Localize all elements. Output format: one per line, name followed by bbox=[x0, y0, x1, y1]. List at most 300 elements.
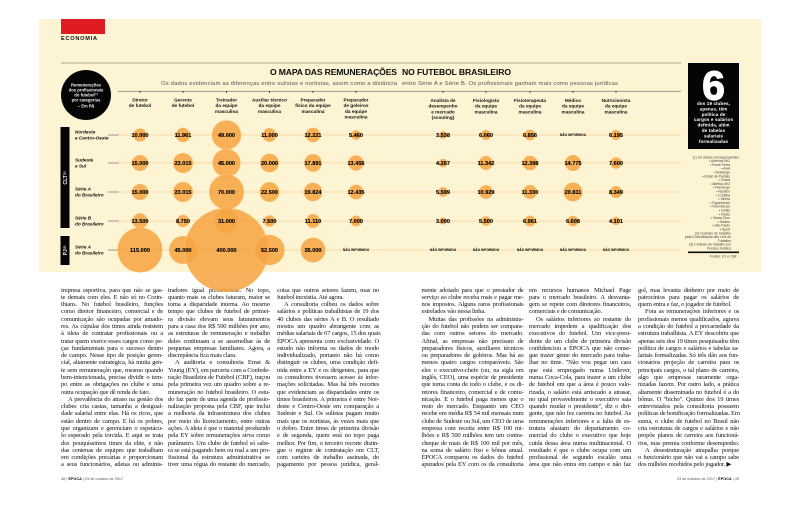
text column 3: ÉPOCA apresenta com exclusividade. O bbox=[277, 338, 379, 345]
footnotes: • Sport bbox=[720, 228, 730, 232]
row labels: Série B bbox=[75, 216, 92, 220]
text column 2: para a casa dos R$ 500 milhões por ano, bbox=[168, 323, 270, 330]
section heading: Economia: ECONOMIA bbox=[61, 36, 98, 42]
callout: black box with number 6: política de bbox=[702, 112, 726, 117]
column headers bbox=[129, 98, 631, 120]
panel: yellow chart background bbox=[39, 19, 761, 272]
sidebar: PJ: (3) bbox=[63, 246, 67, 249]
values: Nordeste e Centro-Oeste: 6.856 bbox=[523, 133, 537, 139]
text column 4: mente adotado para que o prestador de bbox=[422, 287, 524, 294]
column headers: Fisiologista bbox=[473, 98, 499, 103]
text column 1: estão dentro de campo. E há os pobres, bbox=[61, 418, 163, 425]
footnotes: (1) Os clubes correspondentes bbox=[693, 155, 739, 159]
callout: black box with number 6: salariais bbox=[704, 133, 723, 138]
values: Série A CLT: 23.015 bbox=[174, 190, 192, 196]
values: Nordeste e Centro-Oeste bbox=[131, 132, 623, 139]
column header rule with ticks bbox=[118, 91, 681, 93]
section tag: red block bbox=[61, 19, 105, 34]
sidebar: CLT bbox=[60, 127, 70, 228]
column headers: da equipe bbox=[345, 109, 367, 114]
text column 6: A desestruturação atrapalha porque bbox=[645, 447, 739, 454]
values: Sudeste e Sul: 7.600 bbox=[609, 161, 623, 167]
values: Série A CLT: 15.000 bbox=[131, 190, 149, 196]
values: Série B CLT: 3.000 bbox=[436, 219, 450, 225]
text column 5: cuida dessa área numa multinacional. O bbox=[529, 440, 631, 447]
text column 5: confidenciou a ÉPOCA que não conse- bbox=[529, 345, 631, 352]
text column 4: Muitas das profissões na administra- bbox=[428, 316, 524, 323]
values: Série A PJ: 45.000 bbox=[174, 248, 192, 254]
text column 5: lhar no time. "Não vou pegar um cara bbox=[529, 359, 631, 366]
text column 4: inglês, CEO), uma espécie de presidente bbox=[422, 374, 524, 381]
footnotes: • Atlético-MG bbox=[710, 182, 730, 186]
values: Série A CLT: 11.330 bbox=[522, 190, 538, 196]
text column 2: pela EY sobre remunerações sirva como bbox=[168, 432, 270, 439]
values: Nordeste e Centro-Oeste: 6.060 bbox=[479, 133, 493, 139]
text column 4: clube de Sudeste ou Sul, um CEO de uma bbox=[422, 418, 524, 425]
values: Sudeste e Sul bbox=[131, 161, 623, 167]
text column 1: como diretor financeiro, comercial e de bbox=[61, 308, 163, 315]
callout: black box with number 6: de tabelas bbox=[702, 128, 726, 133]
callout: black box with number 6: formalizadas bbox=[699, 139, 728, 144]
text column 5: mercial do clube o executivo que hoje bbox=[529, 432, 631, 439]
text column 4: cheque de mais de R$ 100 mil por mês, bbox=[422, 440, 524, 447]
column headers: Treinador bbox=[216, 98, 237, 102]
text column 3: médias salariais de 67 cargos, 15 dos quais bbox=[277, 330, 381, 337]
text column 3: futebol inexistia. Até agora. bbox=[277, 294, 344, 301]
text column 5: gem se repete com diretores financeiros, bbox=[529, 301, 631, 308]
column headers: masculina bbox=[519, 109, 542, 114]
text column 3: times brasileiros. A primeira é entre Nor- bbox=[277, 396, 379, 403]
text column 4: ção do futebol não podem ser compara- bbox=[422, 323, 524, 330]
text column 5: executivos do futebol. Um vice-presi- bbox=[529, 330, 631, 337]
text column 1: res. As cúpulas dos times ainda resistem bbox=[61, 323, 163, 330]
footnotes: Trabalho bbox=[718, 239, 731, 243]
text column 2 bbox=[168, 287, 270, 468]
text column 1: te demais com eles. E não só no Corin- bbox=[61, 294, 163, 301]
text column 6: cria estruturas de cargos e salários e não bbox=[638, 425, 739, 432]
text column 2: pequenas empresas familiares. Agora, a bbox=[168, 345, 270, 352]
text column 4: ÉPOCA comparou os dados do futebol bbox=[422, 454, 524, 461]
row labels: Sudeste bbox=[75, 158, 94, 162]
column headers: da equipe bbox=[605, 104, 627, 109]
text column 4: Afinal, as empresas não precisam de bbox=[422, 338, 524, 345]
footnotes: • Avaí bbox=[721, 167, 730, 171]
column headers: e mercado bbox=[431, 109, 455, 114]
text column 1: a seus funcionários, atletas ou adminis- bbox=[61, 461, 163, 468]
values: Série B CLT: 4.101 bbox=[609, 219, 623, 225]
values: Série A PJ: NÃO INFORMOU bbox=[560, 247, 587, 252]
text column 4: lhões e R$ 500 milhões tem um contra- bbox=[422, 432, 524, 439]
values: Série A CLT bbox=[131, 190, 623, 196]
column headers: da equipe bbox=[216, 103, 238, 108]
text column 6: o funcionário que não vai a campo sabe bbox=[638, 454, 739, 461]
text column 5: profissional de segundo escalão uma bbox=[529, 454, 631, 461]
column headers: da equipe bbox=[475, 104, 497, 109]
text column 3: individualizado, portanto não há como bbox=[277, 352, 379, 359]
text column 3: e de segunda, quem está no topo paga bbox=[277, 432, 379, 439]
text column 1: te sem remuneração que, mesmo quando bbox=[61, 367, 163, 374]
text column 3: nida entre a EY e os dirigentes, para que bbox=[277, 367, 379, 374]
footnotes: • Santos bbox=[717, 220, 730, 224]
legend: black circle: por categorias bbox=[72, 98, 101, 103]
column headers: Gerente bbox=[174, 98, 192, 102]
values: Série B CLT: 11.110 bbox=[305, 219, 321, 225]
text column 6: Fora as remunerações inferiores e os bbox=[645, 308, 739, 315]
legend: black circle: do futebol bbox=[74, 92, 95, 97]
text column 6: política de cargos e salários e tabelas sa- bbox=[638, 345, 739, 352]
text column 5: Os salários inferiores ao restante do bbox=[536, 316, 631, 323]
text column 2: nalização proposta pela CBF, que inclui bbox=[168, 403, 270, 410]
values: Série A PJ: NÃO INFORMOU bbox=[603, 247, 630, 252]
column headers: Nutricionista bbox=[602, 98, 631, 103]
text column 6: estrutura trabalhista. A EY descobriu que bbox=[638, 330, 739, 337]
text column 6: cionários projeção de carreira para os bbox=[638, 359, 739, 366]
values: Série B CLT: 6.961 bbox=[523, 219, 537, 225]
text column 2: rá se está pagando bem ou mal a um pro- bbox=[168, 447, 270, 454]
callout: black box with number 6: cargos e salários bbox=[694, 117, 733, 122]
values: Série B CLT: 5.500 bbox=[479, 219, 493, 225]
text column 6: a condição do futebol a precariedade da bbox=[638, 323, 739, 330]
text column 3 bbox=[277, 287, 381, 468]
footnotes: • América-MG bbox=[709, 159, 730, 163]
text column 4: recebe em média R$ 54 mil mensais num bbox=[422, 410, 524, 417]
text column 6: suma, o clube de futebol no Brasil não bbox=[638, 418, 739, 425]
text column 1: à ideia de contratar profissionais ou a bbox=[61, 330, 163, 337]
text column 3: gue o regime de contratação em CLT, bbox=[277, 447, 379, 454]
values: Série A CLT: 12.435 bbox=[347, 190, 365, 196]
footnotes bbox=[685, 155, 739, 258]
values: Série A CLT: 19.824 bbox=[304, 190, 322, 196]
footnotes: (2) Contrato de trabalho bbox=[695, 231, 731, 235]
legend: black circle: dos profissionais bbox=[69, 87, 104, 92]
text column 3: distinguir os clubes, uma condição defi- bbox=[277, 359, 379, 366]
text column 3: estudo não informa os dados de modo bbox=[277, 345, 379, 352]
chart title: NO FUTEBOL BRASILEIRO bbox=[402, 67, 511, 77]
callout: black box with number 6: dos 19 clubes, bbox=[697, 101, 730, 106]
text column 1: cial, altamente estratégica, há muita gen- bbox=[61, 359, 163, 366]
text column 4 bbox=[422, 287, 524, 468]
values: Série A CLT: 8.349 bbox=[609, 190, 623, 196]
row labels: do Brasileiro bbox=[75, 222, 104, 226]
values: Série A PJ: NÃO INFORMOU bbox=[343, 247, 370, 252]
row labels: e Centro-Oeste bbox=[75, 136, 109, 140]
callout: black box with number 6: 6 bbox=[702, 62, 725, 108]
text column 5: gente, que não fez carreira no futebol. As bbox=[529, 410, 631, 417]
text column 3: A consultoria colheu os dados sobre bbox=[284, 301, 379, 308]
text column 2: por meio do licenciamento, entre outras bbox=[168, 418, 270, 425]
text column 6: quem entra e faz, o jogador de futebol. bbox=[638, 301, 731, 308]
text column 5: que está empregado numa Unilever, bbox=[529, 367, 631, 374]
values: Nordeste e Centro-Oeste: NÃO INFORMOU bbox=[560, 132, 587, 137]
values: Série B CLT: 6.608 bbox=[566, 219, 580, 225]
legend: black circle bbox=[61, 70, 111, 120]
values: Sudeste e Sul: 23.015 bbox=[174, 161, 192, 167]
column headers: masculina bbox=[605, 109, 628, 114]
text column 2: fissional da estrutura administrativa se bbox=[168, 454, 270, 461]
footnotes: (3) Contrato de trabalho por bbox=[689, 243, 732, 247]
column headers: masculina bbox=[302, 109, 325, 114]
text column 2: ra divisão elevam seus faturamentos bbox=[168, 316, 270, 323]
text column 4: serviço ao clube receba mais e pagar me- bbox=[422, 294, 524, 301]
text column 4: nicação. E o futebol paga menos que o bbox=[422, 396, 524, 403]
values: Nordeste e Centro-Oeste: 3.538 bbox=[436, 133, 450, 139]
values: Série A PJ: NÃO INFORMOU bbox=[430, 247, 457, 252]
footnotes: Fontes: EY e CBF bbox=[710, 254, 737, 258]
footnotes: • Oeste bbox=[719, 212, 730, 216]
text column 6: entrevistados pela consultoria possuem bbox=[638, 403, 739, 410]
text column 5: rizada, o salário está arriscado a atrasar, bbox=[529, 389, 631, 396]
callout: black box with number 6 bbox=[688, 62, 739, 149]
footer: right page: 23 de outubro de 2017 | ÉPOCA | 49 bbox=[677, 476, 739, 480]
text column 5: de futebol em que a área é pouco valo- bbox=[529, 381, 631, 388]
text column 3: coisa que outros setores fazem, mas no bbox=[277, 287, 379, 294]
column headers: físico da equipe bbox=[295, 103, 331, 108]
text column 1: das centenas de equipes que trabalham bbox=[61, 447, 163, 454]
text column 1: que organizam e gerenciam o espetácu- bbox=[61, 425, 163, 432]
values: Nordeste e Centro-Oeste: 49.000 bbox=[218, 133, 235, 139]
values: Sudeste e Sul: 13.456 bbox=[347, 161, 365, 167]
text column 4: apurados pela EY com os da consultoria bbox=[422, 461, 524, 468]
sidebar: CLT: (2) bbox=[63, 171, 67, 175]
text column 2: quanto mais os clubes faturam, maior se bbox=[168, 294, 270, 301]
text column 1: clubes cria castas, tamanha a desigual- bbox=[61, 403, 163, 410]
values: Série A PJ: 52.500 bbox=[261, 248, 278, 254]
row labels bbox=[75, 130, 109, 256]
text column 2: A auditoria e consultoria Ernst & bbox=[175, 359, 270, 366]
text column 3: salários e políticas trabalhistas de 19 dos bbox=[277, 308, 379, 315]
text column 2: tradores igual precariedade. No topo, bbox=[168, 287, 270, 294]
text column 6: propõe planos de carreira aos funcioná- bbox=[638, 432, 739, 439]
bubbles: all circles bbox=[117, 120, 622, 292]
values: Nordeste e Centro-Oeste: 5.460 bbox=[349, 133, 363, 139]
values: Sudeste e Sul: 20.000 bbox=[261, 161, 278, 167]
text column 6: lariais formalizadas. Só três dão aos fun- bbox=[638, 352, 739, 359]
column headers: masculina bbox=[345, 114, 368, 119]
footnotes: • Coritiba bbox=[716, 193, 730, 197]
footnotes: Pessoa Jurídica bbox=[707, 246, 731, 250]
column headers: Diretor bbox=[132, 98, 148, 102]
footnotes: • Náutico bbox=[716, 190, 730, 194]
values: Sudeste e Sul: 12.398 bbox=[521, 161, 539, 167]
values: Série B CLT bbox=[131, 219, 623, 225]
footnotes: • Fluminense bbox=[710, 205, 730, 209]
text column 2: discrepância fica mais clara. bbox=[168, 352, 236, 359]
text column 1: A prevalência do atraso na gestão dos bbox=[68, 396, 163, 403]
values: Sudeste e Sul: 14.775 bbox=[564, 161, 582, 167]
callout: black box with number 6: apenas, têm bbox=[700, 107, 727, 112]
values: Série B CLT: 7.000 bbox=[349, 219, 363, 225]
text column 5: numa Coca-Cola, para trazer a um clube bbox=[529, 374, 631, 381]
values: Nordeste e Centro-Oeste: 12.221 bbox=[304, 133, 322, 139]
text column 3: Sudeste e Sul. Os sulistas pagam muito bbox=[277, 410, 379, 417]
values: Série B CLT: 13.500 bbox=[131, 219, 149, 225]
text column 1 bbox=[61, 287, 164, 468]
text column 5: para o mercado brasileiro. A desvanta- bbox=[529, 294, 631, 301]
text column 5: mercado impedem a qualificação dos bbox=[529, 323, 631, 330]
text column 3: o dobro. Entre times de primeira divisão bbox=[277, 425, 379, 432]
column headers: masculina bbox=[258, 109, 281, 114]
chart subtitle: entre Série A e Série B. Os profissionais ganham mais como pessoas jurídicas bbox=[402, 81, 618, 87]
text column 3: deste e Centro-Oeste em comparação a bbox=[277, 403, 379, 410]
text column 3: com carteira de trabalho assinada, do bbox=[277, 454, 379, 461]
column headers: de goleiros bbox=[343, 103, 369, 108]
text column 6: políticas de bonificação formalizadas. Em bbox=[638, 410, 740, 417]
values: Sudeste e Sul: 17.891 bbox=[304, 161, 322, 167]
row labels: Série A bbox=[75, 244, 92, 250]
text column 6: patrocínios para pagar os salários de bbox=[638, 294, 739, 301]
column headers: Auxiliar técnico bbox=[252, 98, 287, 102]
text column 6: gol, mas levanta dinheiro por meio de bbox=[638, 287, 739, 294]
values: Série A PJ: 400.000 bbox=[216, 248, 237, 254]
values: Série B CLT: 7.500 bbox=[262, 219, 276, 225]
column headers: desempenho bbox=[429, 104, 458, 109]
text column 2: ração Brasileira de Futebol (CBF), traçou bbox=[168, 374, 270, 381]
values: Série A PJ: 35.000 bbox=[304, 248, 322, 254]
text column 2: pela primeira vez um quadro sobre a re- bbox=[168, 381, 270, 388]
chart subtitle: Os dados evidenciam as diferenças entre sulistas e nortistas, assim como a distância bbox=[161, 81, 398, 87]
footnotes: • Ponte Preta bbox=[710, 163, 730, 167]
text column 2: muneração no futebol brasileiro. O estu- bbox=[168, 389, 270, 396]
text column 4: eles o executivo-chefe (ou, na sigla em bbox=[422, 367, 524, 374]
text column 3: 40 clubes das séries A e B. O resultado bbox=[277, 316, 379, 323]
values: Nordeste e Centro-Oeste: 11.000 bbox=[261, 133, 278, 139]
footer: left page: 48 | ÉPOCA | 23 de outubro de 2017 bbox=[61, 476, 123, 480]
values: Nordeste e Centro-Oeste: 11.961 bbox=[175, 133, 191, 139]
text column 1: dade salarial entre elas. Há os ricos, que bbox=[61, 410, 163, 417]
text column 6: principais cargos, o tal plano de carreira, bbox=[638, 367, 739, 374]
text column 6: apenas seis dos 19 times pesquisados têm bbox=[638, 338, 739, 345]
text column 4: ou preparadores de goleiros. Mas há ao bbox=[422, 352, 524, 359]
text column 4: nos impostos. Alguns raros profissionais bbox=[422, 301, 524, 308]
text column 3: que evidenciam as disparidades entre os bbox=[277, 389, 379, 396]
text column 6: profissionais menos qualificados, agrava bbox=[638, 316, 739, 323]
text column 3: melhor. Por fim, o terceiro recorte distin- bbox=[277, 440, 379, 447]
values: Série A CLT: 10.929 bbox=[477, 190, 495, 196]
text column 3: pagamento por pessoa jurídica, geral- bbox=[277, 461, 379, 468]
text column 5: em recursos humanos Michael Page bbox=[529, 287, 631, 294]
text column 1: comunicação são ocupadas por amado- bbox=[61, 316, 163, 323]
footnotes: • Flamengo bbox=[713, 186, 730, 190]
column headers: masculina bbox=[215, 109, 238, 114]
text column 6: bônus. O "bicho". Quinze dos 19 times bbox=[638, 396, 739, 403]
column headers: masculina bbox=[475, 109, 498, 114]
values: Sudeste e Sul: 11.342 bbox=[478, 161, 494, 167]
legend: black circle: Remunerações bbox=[71, 82, 102, 87]
text column 5: resultado é que o clube ocupa com um bbox=[529, 447, 631, 454]
column headers: da equipe bbox=[259, 103, 281, 108]
text column 1: de campo. Nesse tipo de posição geren- bbox=[61, 352, 163, 359]
callout: black box with number 6: definida, além bbox=[697, 122, 730, 127]
text column 6: altamente disseminada no futebol é a do bbox=[638, 389, 739, 396]
values: Sudeste e Sul: 15.000 bbox=[131, 161, 149, 167]
column headers: Preparador bbox=[343, 98, 369, 102]
text column 4: que toma conta de todo o clube, e os di- bbox=[422, 381, 524, 388]
text column 5: área que não entra em campo e não faz bbox=[529, 461, 631, 468]
text column 1: thians. No futebol brasileiro, funções bbox=[61, 301, 163, 308]
text column 1: lo esperado pela torcida. E aqui se trata bbox=[61, 432, 163, 439]
text column 2: tempo que clubes de futebol de primei- bbox=[168, 308, 270, 315]
chart title bbox=[270, 67, 511, 77]
text column 4: empresa com receita entre R$ 100 mi- bbox=[422, 425, 524, 432]
text column 4: menos quatro cargos comparáveis. São bbox=[422, 359, 524, 366]
footnotes: • São Paulo bbox=[712, 224, 730, 228]
text column 3: os consultores tivessem acesso às infor- bbox=[277, 374, 379, 381]
footnotes: • Goiás bbox=[719, 208, 730, 212]
column headers: Fisioterapeuta bbox=[514, 98, 546, 103]
text column 3: mações solicitadas. Mas há três recortes bbox=[277, 381, 379, 388]
chart subtitle bbox=[161, 81, 618, 87]
text column 1: ças fundamentais para o sucesso dentro bbox=[61, 345, 163, 352]
legend: black circle: (*) bbox=[95, 92, 98, 96]
text column 2: torna a disparidade interna. Ao mesmo bbox=[168, 301, 270, 308]
values: Série A CLT: 70.000 bbox=[218, 190, 235, 196]
column headers: da equipe bbox=[562, 104, 584, 109]
row labels: do Brasileiro bbox=[75, 250, 104, 256]
values: Série A PJ: NÃO INFORMOU bbox=[473, 247, 500, 252]
footnotes: • Vitória bbox=[718, 197, 730, 201]
text column 5 bbox=[529, 287, 632, 468]
text column 5: remunerações inferiores e a falta de es- bbox=[529, 418, 631, 425]
text column 4: resto do mercado. Enquanto um CEO bbox=[422, 403, 524, 410]
text column 2: ações. A ideia é que o material produzido bbox=[168, 425, 270, 432]
values: Série A CLT: 5.599 bbox=[436, 190, 450, 196]
footnotes: pela Consolidação das Leis do bbox=[685, 235, 731, 239]
text column 5: dente de um clube de primeira divisão bbox=[529, 338, 631, 345]
row labels: do Brasileiro bbox=[75, 192, 104, 198]
row labels: e Sul bbox=[75, 164, 87, 168]
column headers: da equipe bbox=[519, 104, 541, 109]
text column 6 bbox=[638, 287, 740, 468]
text column 4: preparadores físicos, auxiliares técnicos bbox=[422, 345, 524, 352]
top rule bbox=[61, 62, 681, 64]
row labels: Série A bbox=[75, 186, 92, 192]
text column 4: na soma de salário fixo e bônus anual. bbox=[422, 447, 524, 454]
text column 5: quando mudar o presidente", diz o diri- bbox=[529, 403, 631, 410]
column headers: de futebol bbox=[172, 103, 194, 108]
values: Série A CLT: 22.500 bbox=[261, 190, 278, 196]
column headers: masculina bbox=[562, 109, 585, 114]
chart title: O MAPA DAS REMUNERAÇÕES bbox=[270, 67, 397, 77]
text column 6: dos milhões recebidos pelo jogador. ▶ bbox=[638, 461, 731, 468]
text column 1: dos pouquíssimos times da elite, e não bbox=[61, 440, 163, 447]
text column 2: as estruturas de remuneração e trabalho bbox=[168, 330, 270, 337]
footnotes: • Figueirense bbox=[710, 201, 730, 205]
column headers: de futebol bbox=[129, 103, 151, 108]
text column 4: estrelados vão nessa linha. bbox=[422, 308, 486, 315]
column headers: Analista de bbox=[430, 98, 456, 103]
text column 6: algo que empresas raramente orga- bbox=[638, 374, 739, 381]
text column 2: deles continuam a se assemelhar às de bbox=[168, 338, 270, 345]
row guide lines bbox=[108, 135, 680, 250]
text column 1: po entre as obrigações no clube e uma bbox=[61, 381, 163, 388]
text column 6: rios, mas premia conforme desempenho. bbox=[638, 440, 739, 447]
row labels: Nordeste bbox=[75, 130, 96, 134]
text column 4: retores financeiro, comercial e de comu- bbox=[422, 389, 524, 396]
values: Nordeste e Centro-Oeste: 6.195 bbox=[609, 133, 623, 139]
values: Série A CLT: 20.811 bbox=[565, 190, 581, 196]
text column 2: parâmetro. Um clube de futebol só sabe- bbox=[168, 440, 270, 447]
values: Série A PJ bbox=[130, 247, 630, 254]
values: Sudeste e Sul: 4.267 bbox=[436, 161, 450, 167]
footnotes: • Santa Cruz bbox=[711, 216, 730, 220]
text column 2: do faz parte de uma agenda de profissio- bbox=[168, 396, 270, 403]
values: Série A PJ: 115.000 bbox=[130, 248, 150, 254]
text column 5: gue trazer gente do mercado para traba- bbox=[529, 352, 631, 359]
values: Série B CLT: 8.750 bbox=[176, 219, 190, 225]
footnotes: • Ceará bbox=[719, 178, 730, 182]
text column 2: tiver uma régua do restante do mercado, bbox=[168, 461, 270, 468]
text column 4: das com outros setores do mercado. bbox=[422, 330, 524, 337]
